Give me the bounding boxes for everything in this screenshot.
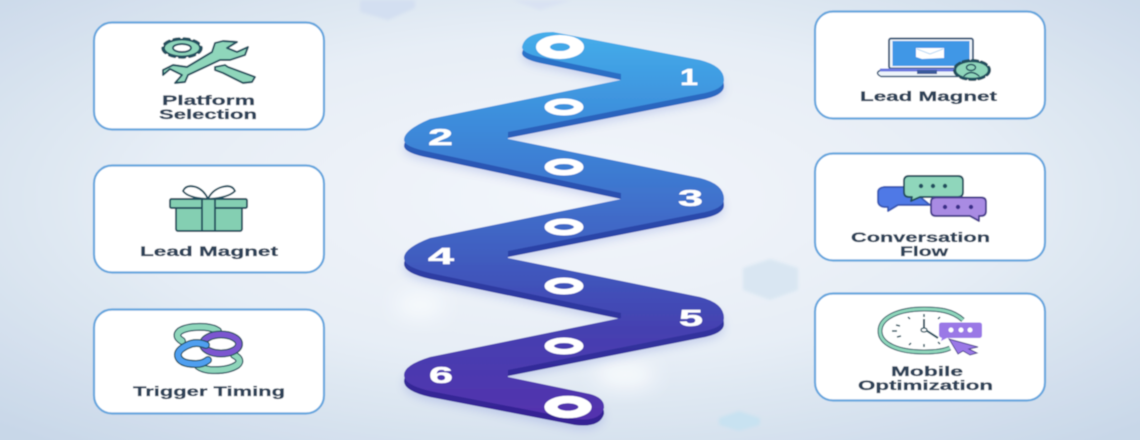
panel: Mobile Optimization [815,294,1045,400]
icon: gear and wrench [163,39,255,83]
ring markers [543,39,585,414]
label: Lead Magnet: Lead Magnet [140,243,279,259]
label: Conversation Flow: Conversation [851,229,990,245]
decorative hexagons [360,0,798,431]
zigzag ribbon [404,32,724,429]
panel: Conversation Flow [815,154,1045,260]
icon: chat bubbles [878,176,986,221]
label: Mobile Optimization: Optimization [858,377,993,393]
step numbers: 4 [428,243,454,269]
icon: laptop with user gear [878,38,989,79]
step numbers: 2 [428,124,453,150]
step numbers: 5 [679,305,703,331]
icon: chain links [177,327,239,370]
icon: gift box [170,186,247,231]
step numbers: 1 [680,64,698,90]
label: Trigger Timing: Trigger Timing [133,383,285,399]
panel: Platform Selection [94,22,324,130]
label: Lead Magnet: Lead Magnet [860,88,998,104]
panel: Lead Magnet left [94,166,324,272]
step numbers [428,64,703,388]
label: Mobile Optimization: Mobile [891,363,963,379]
panel: Trigger Timing [94,310,324,414]
label: Mobile Optimization [858,363,993,393]
icon: clock with chat and cursor [880,309,982,355]
step numbers: 3 [678,185,703,211]
label: Platform Selection: Selection [159,106,257,122]
label: Conversation Flow: Flow [900,243,948,259]
label: Conversation Flow [851,229,990,259]
step numbers: 6 [429,362,453,388]
panel: Lead Magnet right [815,12,1045,118]
label: Platform Selection: Platform [162,92,255,108]
label: Platform Selection [159,92,257,122]
